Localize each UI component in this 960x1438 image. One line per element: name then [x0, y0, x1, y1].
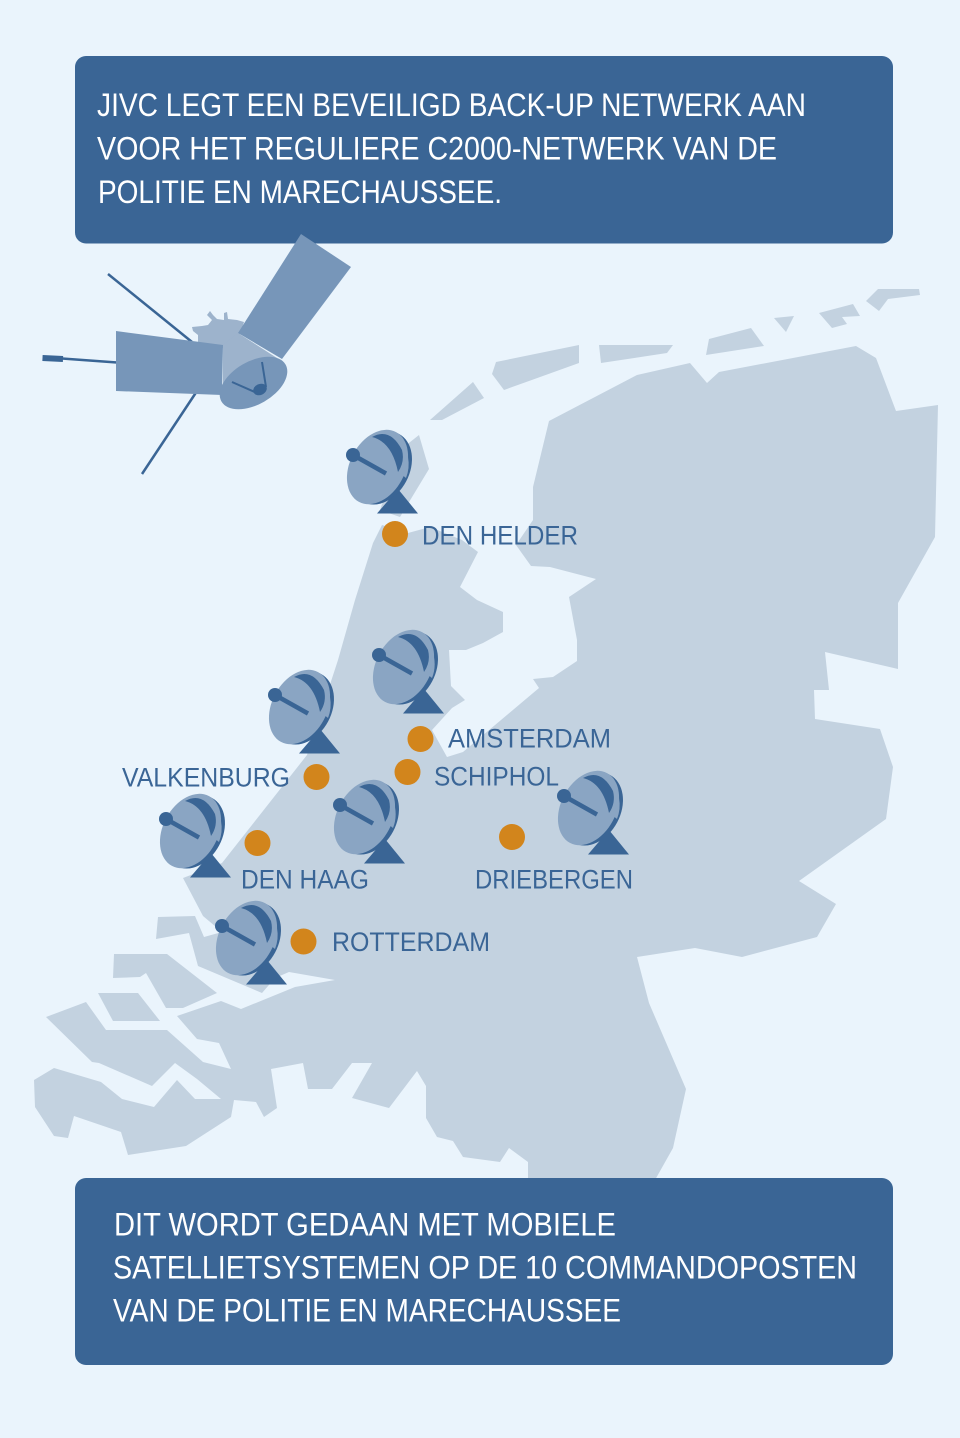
Zeeland island small [98, 993, 160, 1021]
location markers [244, 521, 525, 954]
solar panel west [116, 331, 223, 395]
label: Den Haag: DEN HAAG [241, 864, 369, 894]
label: Valkenburg: VALKENBURG [122, 762, 290, 792]
label: Den Helder: DEN HELDER [422, 520, 578, 550]
Texel tip [380, 435, 429, 517]
panel: top message [75, 56, 893, 244]
label: Amsterdam: AMSTERDAM [448, 724, 611, 754]
label: Driebergen: DRIEBERGEN [475, 864, 633, 894]
map of the Netherlands [34, 289, 938, 1180]
antennas [42, 274, 197, 474]
label: Schiphol: SCHIPHOL [434, 762, 559, 792]
top message line 1: JIVC LEGT EEN BEVEILIGD BACK-UP NETWERK AAN [97, 87, 806, 123]
icon: dish Schiphol [322, 769, 411, 865]
icon: satellite [42, 234, 351, 474]
panel: bottom message [75, 1178, 893, 1365]
solar panel north-east [238, 234, 351, 359]
label: Rotterdam: ROTTERDAM [332, 927, 490, 957]
Zeeland island north [113, 954, 217, 1008]
bottom message line 3: VAN DE POLITIE EN MARECHAUSSEE [113, 1292, 621, 1328]
Wadden island 2 [492, 345, 579, 390]
icon: dish Den Helder [335, 419, 424, 515]
Wadden island 4 [706, 328, 764, 355]
Wadden island 5 [774, 316, 794, 332]
satellite cone [223, 333, 277, 387]
satellite feed [232, 362, 269, 397]
icon: dish Amsterdam [361, 619, 450, 715]
Wadden island 6 [819, 304, 860, 328]
icon: dish Rotterdam [204, 890, 293, 986]
Wadden island 1 [430, 382, 484, 420]
mainland [34, 346, 938, 1180]
satellite dish [211, 346, 296, 420]
icon: dish Driebergen [546, 760, 635, 856]
bottom message line 1: DIT WORDT GEDAAN MET MOBIELE [114, 1206, 616, 1242]
top message line 3: POLITIE EN MARECHAUSSEE. [98, 174, 502, 210]
satellite body bumps [192, 311, 244, 348]
icon: dish Den Haag [148, 783, 237, 879]
Wadden island 7 [866, 289, 920, 311]
Wadden island 3 [599, 345, 673, 363]
top message line 2: VOOR HET REGULIERE C2000-NETWERK VAN DE [97, 130, 777, 166]
bottom message line 2: SATELLIETSYSTEMEN OP DE 10 COMMANDOPOSTEN [113, 1250, 857, 1286]
icon: dish Valkenburg [257, 659, 346, 755]
